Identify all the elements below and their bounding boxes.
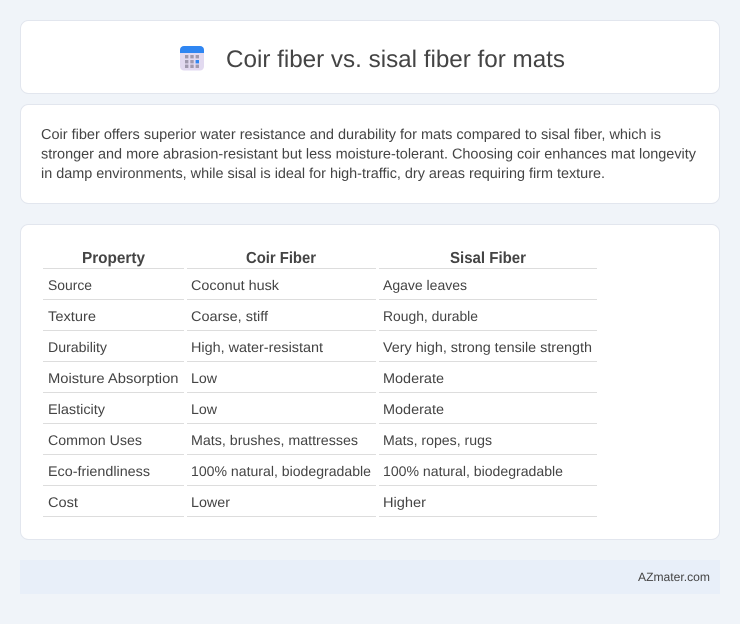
panel: summary paragraph: Coir fiber offers superior water resistance and durability for mats compared to sisal fiber, which is	[41, 127, 661, 143]
row: eco-friendliness	[48, 463, 563, 479]
row: cost: Lower	[191, 494, 230, 510]
row: source	[48, 277, 467, 293]
icon: calendar	[180, 46, 204, 70]
row: moisture absorption	[48, 370, 444, 386]
row: texture	[48, 308, 478, 324]
footer bar	[20, 560, 720, 594]
row: eco-friendliness: 100% natural, biodegradable	[191, 463, 371, 479]
row: texture: Rough, durable	[383, 308, 478, 324]
row: source: Coconut husk	[191, 277, 280, 293]
row: cost: Higher	[383, 494, 426, 510]
row: common uses: Mats, brushes, mattresses	[191, 432, 358, 448]
row: durability: Very high, strong tensile strength	[383, 339, 592, 355]
title: Coir fiber vs. sisal fiber for mats	[226, 46, 565, 73]
panel: summary paragraph: stronger and more abrasion-resistant but less moisture-tolerant. Choosing coir enhances mat longevity	[41, 146, 697, 162]
row: moisture absorption: Low	[191, 370, 218, 386]
row: eco-friendliness: 100% natural, biodegradable	[383, 463, 563, 479]
row: elasticity	[48, 401, 444, 417]
table header: Property	[82, 250, 145, 267]
row: elasticity: Low	[191, 401, 218, 417]
row: durability: Durability	[48, 339, 107, 355]
row: common uses: Common Uses	[48, 432, 142, 448]
row: texture: Texture	[48, 308, 96, 324]
title panel	[20, 20, 720, 94]
table header	[82, 250, 526, 267]
row: durability: High, water-resistant	[191, 339, 323, 355]
row: elasticity: Moderate	[383, 401, 444, 417]
row: moisture absorption: Moderate	[383, 370, 444, 386]
row: texture: Coarse, stiff	[191, 308, 268, 324]
row: eco-friendliness: Eco-friendliness	[48, 463, 150, 479]
row: common uses: Mats, ropes, rugs	[383, 432, 492, 448]
table header: Coir Fiber	[246, 250, 316, 267]
panel: summary paragraph	[20, 104, 720, 204]
row: cost: Cost	[48, 494, 78, 510]
footer credit: AZmater.com	[638, 570, 710, 584]
table header: Sisal Fiber	[450, 250, 526, 267]
row: source: Agave leaves	[383, 277, 467, 293]
row: moisture absorption: Moisture Absorption	[48, 370, 178, 386]
panel: comparison table	[20, 224, 720, 540]
row: source: Source	[48, 277, 92, 293]
row: common uses	[48, 432, 492, 448]
row: cost	[48, 494, 426, 510]
row: durability	[48, 339, 592, 355]
panel: summary paragraph: in damp environments, while sisal is ideal for high-traffic, dry areas requiring firm texture.	[41, 166, 605, 182]
row: elasticity: Elasticity	[48, 401, 105, 417]
